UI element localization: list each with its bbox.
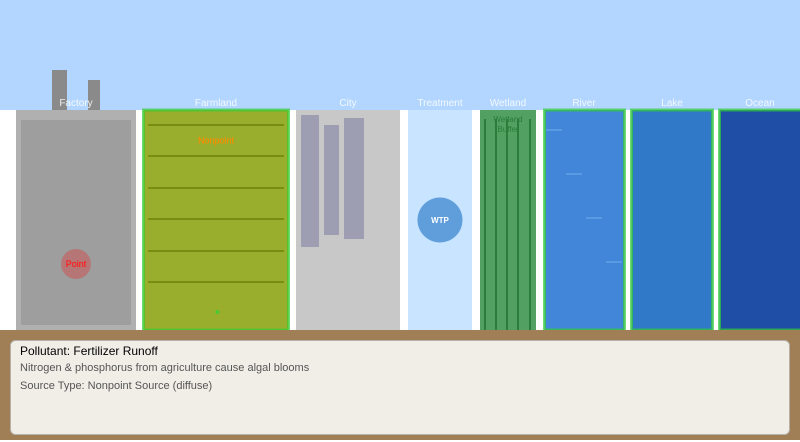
icon: water treatment plant bbox=[418, 198, 462, 242]
zone labels: Wetland bbox=[490, 98, 526, 109]
zone labels: Factory bbox=[59, 98, 93, 109]
wetland reeds bbox=[485, 119, 530, 330]
point source marker bbox=[61, 249, 91, 279]
treatment background bbox=[408, 110, 472, 330]
sky background bbox=[0, 0, 800, 110]
panel: farmland bbox=[144, 110, 288, 330]
panel: lake bbox=[632, 110, 712, 330]
factory building bbox=[16, 110, 136, 330]
panel: city bbox=[296, 110, 400, 330]
info card bbox=[10, 340, 790, 434]
city buildings bbox=[301, 115, 364, 247]
panel: factory bbox=[16, 70, 136, 330]
zone labels bbox=[59, 98, 775, 109]
source type: Source Type: Nonpoint Source (diffuse) bbox=[20, 380, 212, 392]
wetland buffer label: Wetland bbox=[493, 115, 523, 124]
farmland field bbox=[144, 110, 288, 330]
runoff particle bbox=[216, 310, 220, 314]
icon: water treatment plant: WTP bbox=[431, 216, 450, 225]
city ground bbox=[296, 110, 400, 330]
zone labels: Ocean bbox=[745, 98, 775, 109]
nonpoint source label: Nonpoint bbox=[198, 136, 235, 146]
wetland buffer label: Buffer bbox=[497, 125, 519, 134]
zone labels: City bbox=[339, 98, 357, 109]
icon: factory chimneys bbox=[52, 70, 100, 110]
panel: pollutant information bbox=[10, 340, 790, 434]
pollutant description: Nitrogen & phosphorus from agriculture cause algal blooms bbox=[20, 362, 310, 374]
river ripples bbox=[546, 130, 622, 262]
crop rows bbox=[148, 125, 284, 282]
panel: wetland bbox=[480, 110, 536, 330]
zone labels: Treatment bbox=[417, 98, 463, 109]
zone labels: River bbox=[572, 98, 596, 109]
panel: treatment bbox=[408, 110, 472, 330]
panel: ocean bbox=[720, 110, 800, 330]
factory inner block bbox=[21, 120, 131, 325]
zone labels: Farmland bbox=[195, 98, 237, 109]
point source marker: Point bbox=[66, 259, 87, 269]
river water bbox=[544, 110, 624, 330]
panel: river bbox=[544, 110, 624, 330]
wetland buffer label bbox=[493, 115, 523, 134]
zone labels: Lake bbox=[661, 98, 683, 109]
pollutant title: Pollutant: Fertilizer Runoff bbox=[20, 344, 159, 358]
wetland background bbox=[480, 110, 536, 330]
ground strip bbox=[0, 330, 800, 440]
